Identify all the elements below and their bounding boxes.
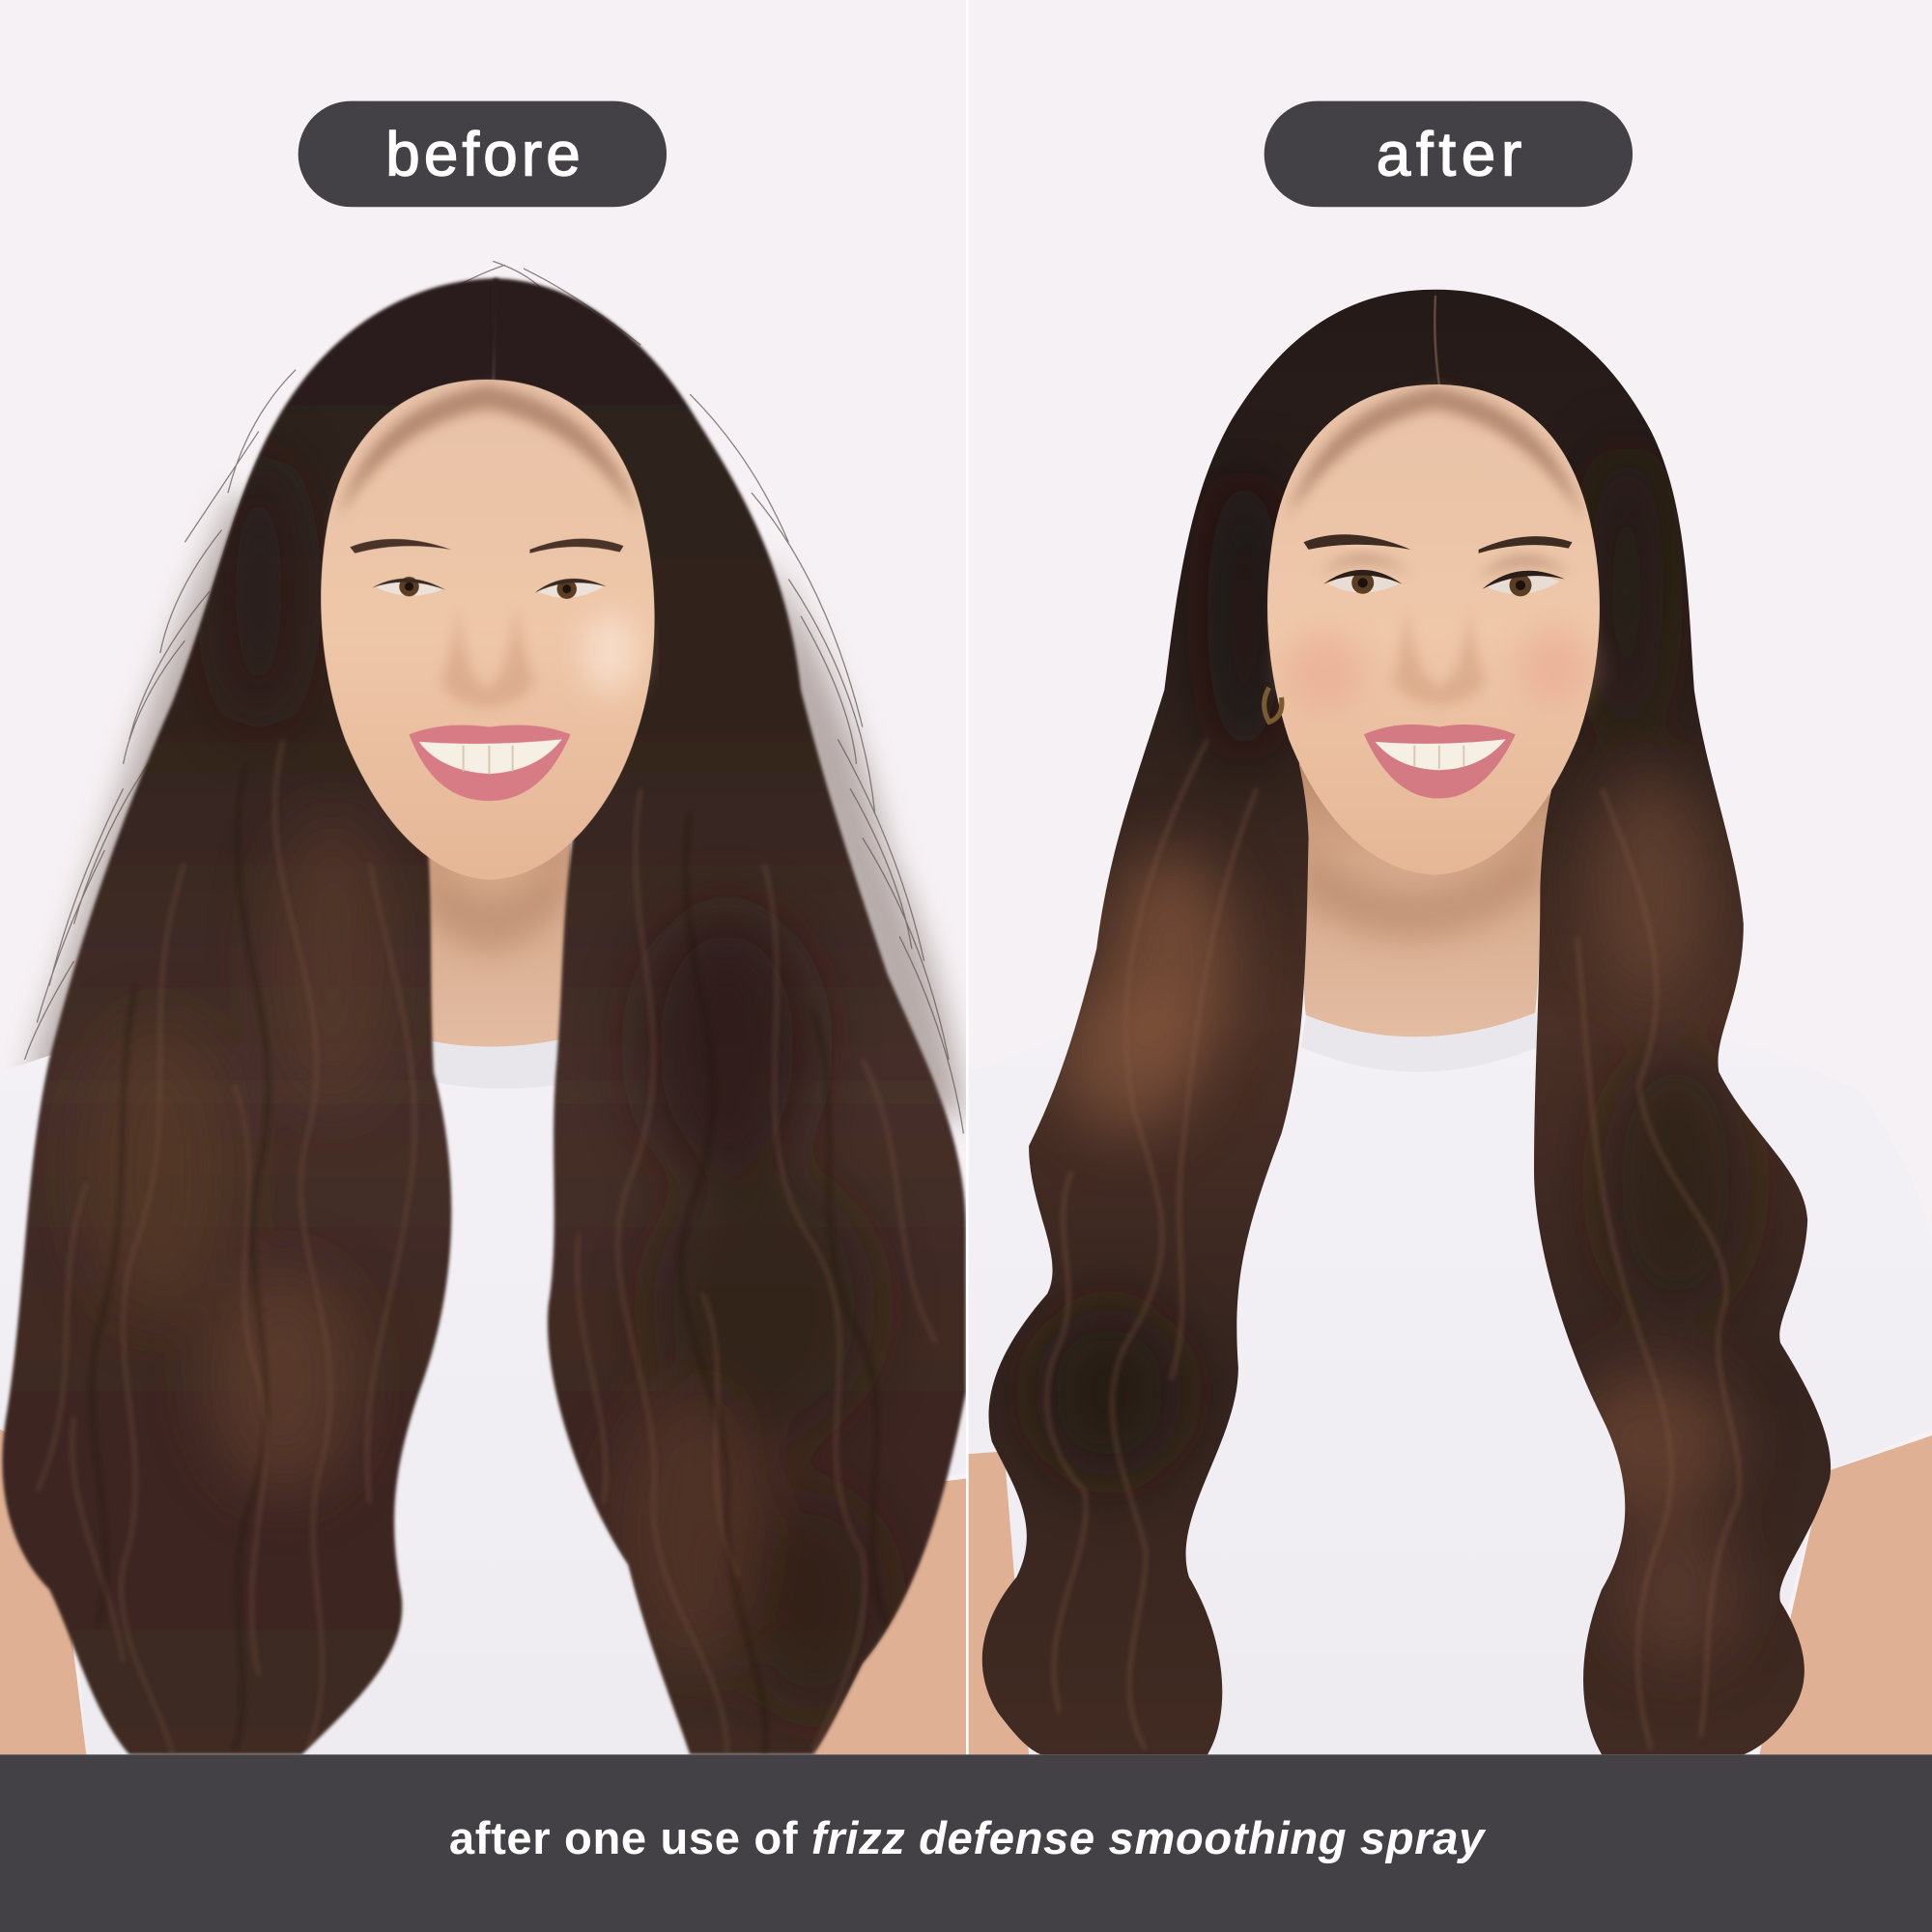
eyes [372,577,607,599]
shirt collar [1301,1012,1538,1072]
divider [966,0,969,1754]
nose [441,604,535,707]
t-shirt [12,1055,52,1117]
t-shirt [969,1010,1932,1754]
back hair behind face [1260,419,1610,777]
hair strands [1047,739,1740,1749]
after pill label: after [1377,120,1521,189]
hair: right lock [1435,290,1831,1754]
eyebrows [350,539,623,554]
hair tone patches [1035,443,1749,1749]
mouth [409,725,571,801]
neck [1293,764,1552,1037]
hair shadow on forehead [339,384,639,518]
hair strands light [37,739,936,1754]
arms [969,1435,1932,1754]
frizz haze [25,493,966,1122]
caption banner [0,1754,1932,1932]
panel: before portrait [0,261,966,1754]
mouth [1364,724,1516,799]
forehead hair shadow [1288,387,1583,518]
neck shadow [425,838,573,952]
eyebrows [1303,534,1573,554]
back hair behind face [321,441,361,566]
neck shadow [1300,826,1547,940]
face [1267,384,1600,875]
face [321,380,655,880]
cheek highlights [582,613,637,693]
before pill label [298,101,667,207]
panel: after portrait [969,290,1932,1754]
earring [1264,688,1282,722]
after pill label [1264,101,1633,207]
shirt collar [431,1038,564,1089]
before pill label: before [385,120,581,189]
hair: left lock [982,290,1435,1754]
caption banner: after one use of frizz defense smoothing spray [449,1813,1487,1864]
hair centre parting [1435,296,1439,384]
arms [0,1430,966,1754]
neck [427,842,571,1047]
eye shadow [1319,555,1571,579]
hair strands dark [92,764,887,1754]
nose [1392,604,1486,705]
frizz strands [25,261,963,1133]
eyes [1323,570,1565,596]
hair tone patches [37,456,936,1754]
hair: right lock [493,278,966,1754]
blush [1285,632,1364,711]
hair: left lock [2,278,499,1754]
